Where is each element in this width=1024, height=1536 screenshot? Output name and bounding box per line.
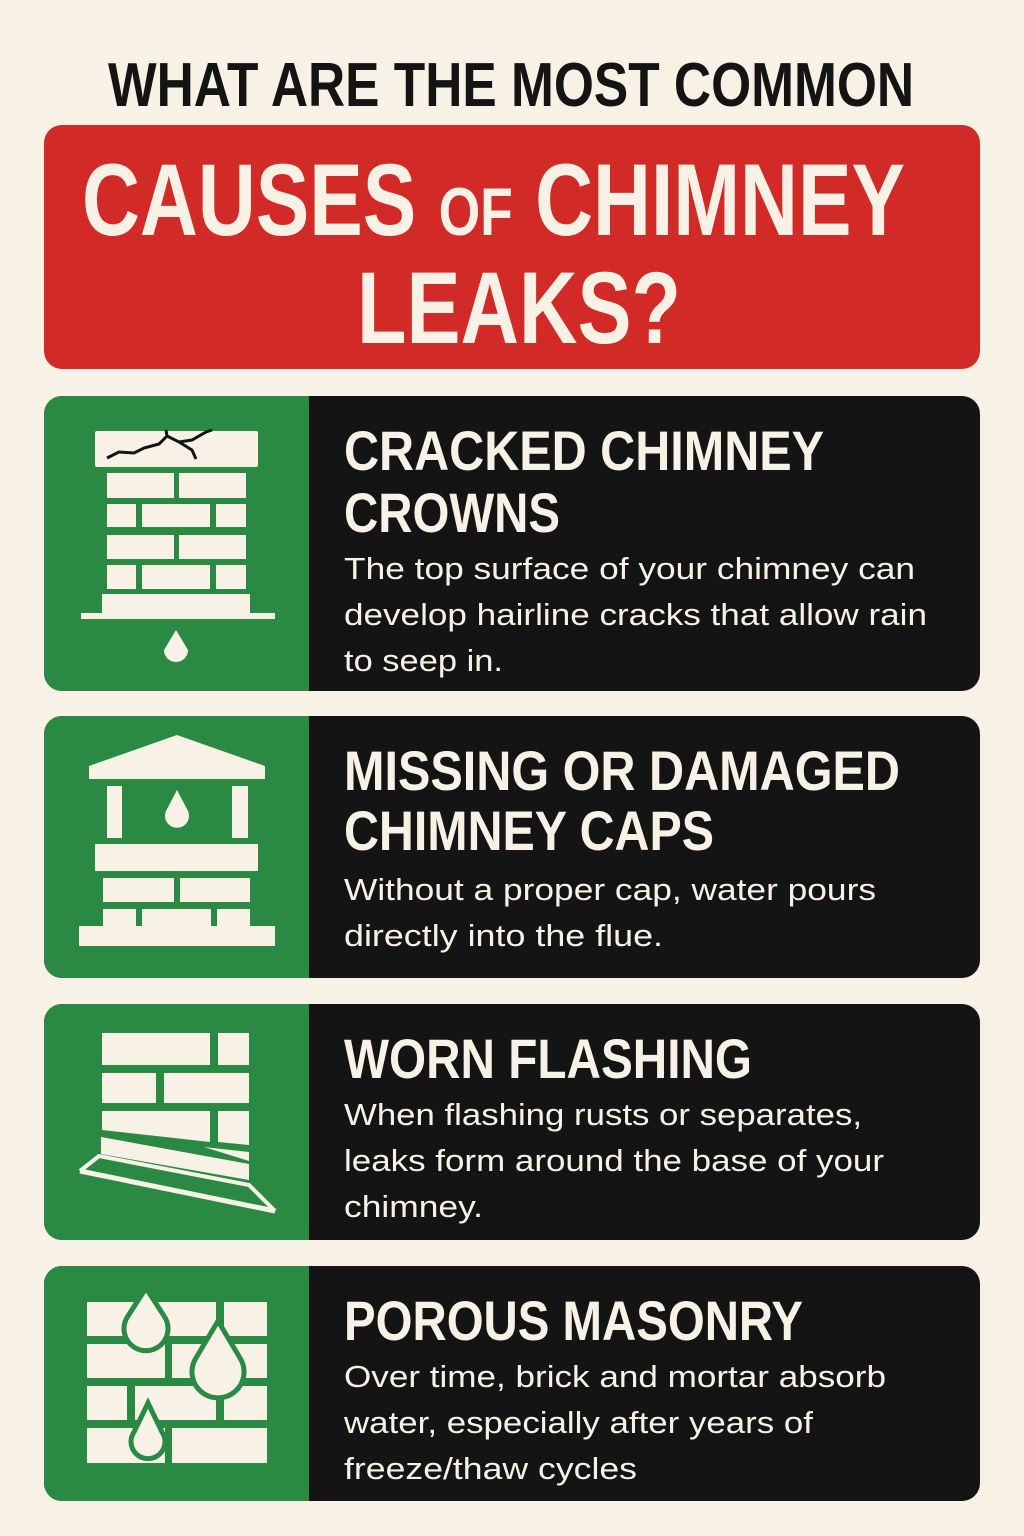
icon: chimney cap (79, 735, 275, 946)
body text: directly into the flue. (344, 918, 663, 953)
panel: worn flashing (44, 1004, 980, 1240)
body text (344, 1097, 884, 1224)
body text: When flashing rusts or separates, (344, 1097, 862, 1132)
icon: cracked crown (81, 430, 275, 662)
red banner (44, 125, 980, 369)
body text: freeze/thaw cycles (344, 1451, 637, 1486)
heading: POROUS MASONRY (344, 1289, 803, 1352)
body text: Over time, brick and mortar absorb (344, 1359, 886, 1394)
panel: cracked chimney crowns (44, 396, 980, 691)
icon: wet bricks (87, 1288, 267, 1463)
panel: porous masonry (44, 1266, 980, 1501)
body text: The top surface of your chimney can (344, 551, 915, 586)
body text: water, especially after years of (343, 1405, 813, 1440)
body text: leaks form around the base of your (344, 1143, 884, 1178)
heading: WORN FLASHING (344, 1027, 752, 1090)
body text (344, 872, 876, 953)
heading: CRACKED CHIMNEY (344, 419, 824, 482)
body text (343, 1359, 886, 1486)
body text: to seep in. (344, 643, 503, 678)
heading: MISSING OR DAMAGED (344, 739, 900, 802)
panel: missing caps: CHIMNEY CAPS (344, 799, 714, 862)
banner heading: CAUSES OF CHIMNEY (82, 143, 905, 257)
banner heading: LEAKS? (357, 251, 681, 365)
body text: develop hairline cracks that allow rain (344, 597, 927, 632)
panel: missing caps (44, 716, 980, 978)
body text: chimney. (344, 1189, 483, 1224)
panel: cracked chimney crowns: CROWNS (344, 481, 560, 544)
body text: Without a proper cap, water pours (344, 872, 876, 907)
body text (344, 551, 927, 678)
icon: flashing (80, 1033, 275, 1211)
banner heading (82, 143, 905, 365)
